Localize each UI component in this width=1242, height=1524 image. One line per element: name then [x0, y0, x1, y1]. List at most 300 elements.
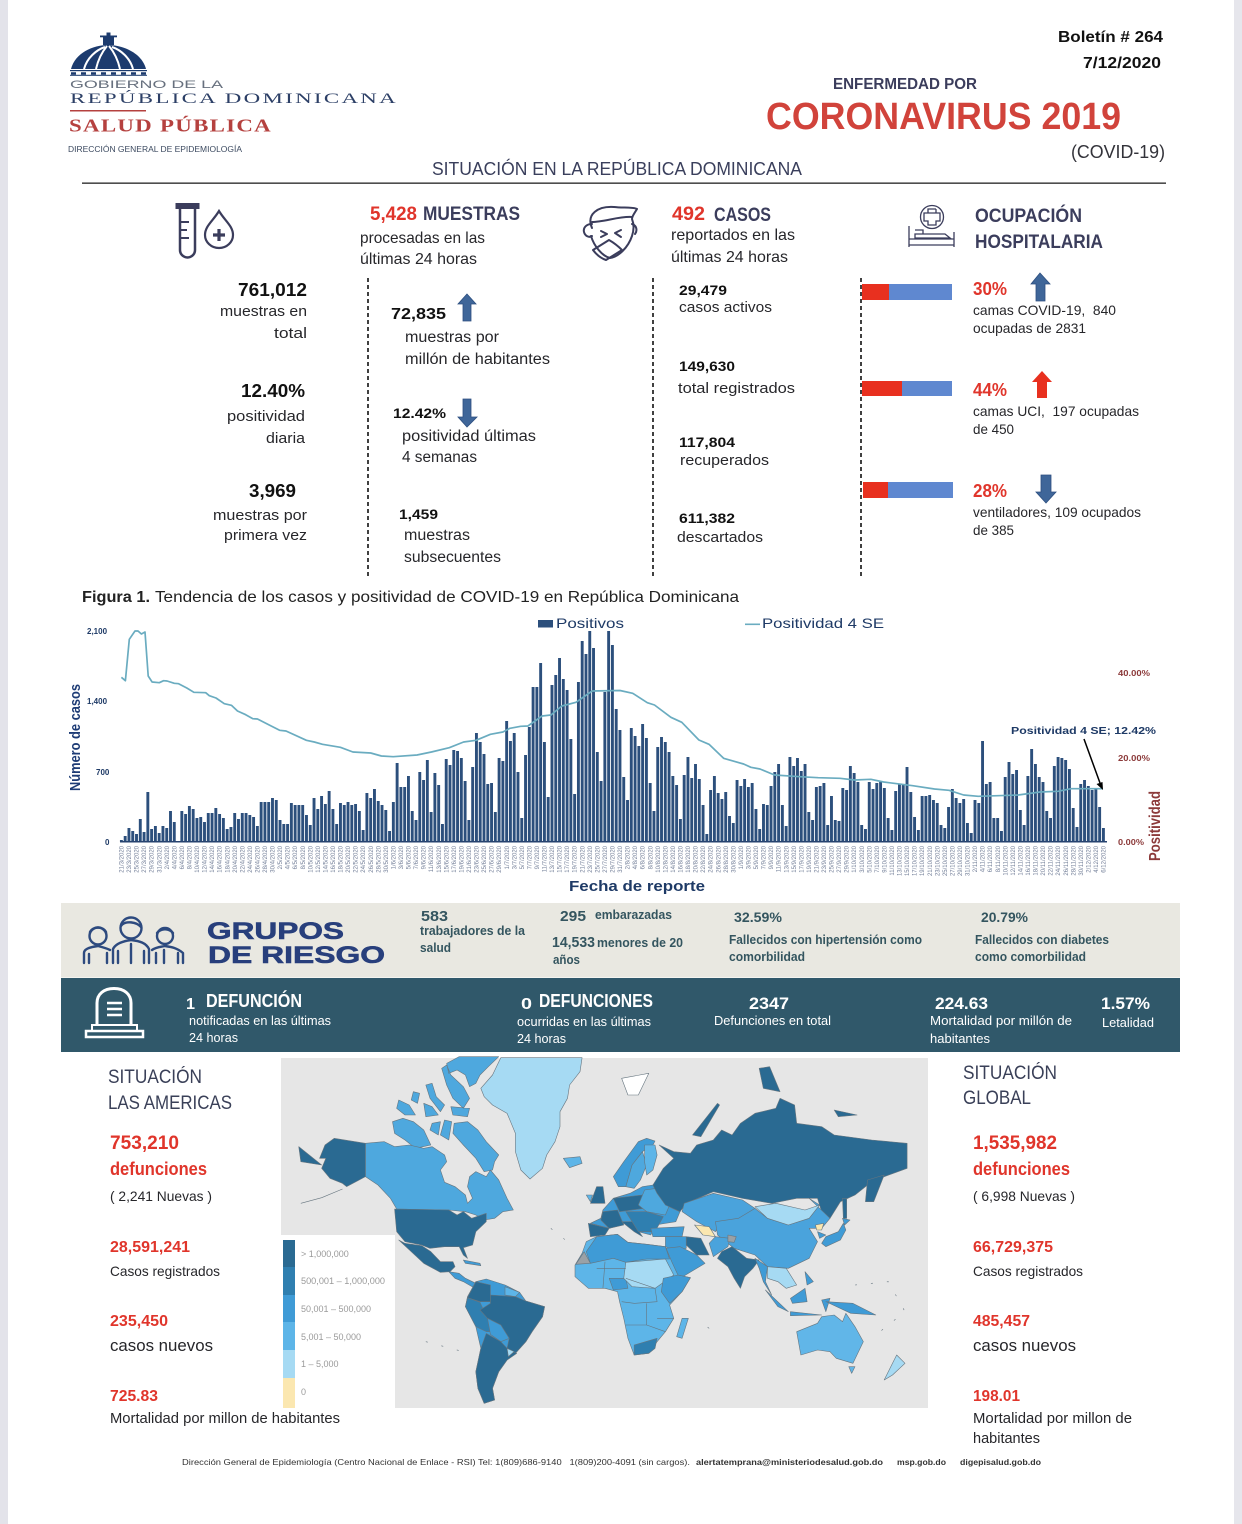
x axis date labels: 23/9/2020	[822, 845, 828, 873]
x axis date labels: 8/4/2020	[188, 845, 194, 869]
x axis date labels: 13/10/2020	[898, 845, 904, 876]
heading: situación global: SITUACIÓN	[963, 1062, 1057, 1084]
map legend: 1 – 5,000	[301, 1359, 339, 1369]
x axis date labels: 3/10/2020	[860, 845, 866, 873]
heading: grupos de riesgo: DE RIESGO	[208, 942, 385, 969]
x axis date labels: 10/8/2020	[656, 845, 662, 873]
stat: recuperados: 117,804	[679, 434, 735, 450]
stat: mortalidad Américas: 725.83	[110, 1388, 158, 1405]
x axis date labels: 24/8/2020	[709, 845, 715, 873]
stat: mortalidad global: habitantes	[973, 1430, 1040, 1447]
x axis date labels: 20/11/2020	[1041, 845, 1047, 876]
title	[766, 76, 1165, 162]
x axis date labels: 21/9/2020	[814, 845, 820, 873]
map: Indonesia and Philippines	[765, 1272, 876, 1316]
map: Norway	[613, 1138, 655, 1187]
x axis date labels: 8/11/2020	[996, 845, 1002, 872]
stat: camas COVID-19 30%: camas COVID-19, 840	[973, 302, 1116, 318]
x axis date labels: 17/9/2020	[799, 845, 805, 873]
map: Aleutians	[301, 1189, 343, 1203]
stat: camas UCI 44%: 44%	[973, 380, 1007, 400]
x axis date labels: 6/11/2020	[988, 845, 994, 872]
map: Afghanistan grey patch	[728, 1235, 736, 1242]
map: Ethiopia Horn	[661, 1275, 690, 1303]
panel: casos header: últimas 24 horas	[671, 249, 788, 266]
bulletin number and date: Boletín # 264	[1058, 29, 1163, 46]
x axis date labels: 16/5/2020	[331, 845, 337, 873]
stat: diabetes: 20.79%	[981, 909, 1029, 925]
map: Peru Ecuador	[465, 1298, 497, 1332]
stat: defunciones global: defunciones	[973, 1159, 1070, 1179]
panel: casos header	[671, 204, 795, 266]
stat: ventiladores 28%: ventiladores, 109 ocupados	[973, 504, 1141, 520]
x axis date labels: 24/11/2020	[1056, 845, 1062, 876]
logo: Gobierno de la República Dominicana, Salud Pública	[68, 32, 398, 154]
map: Guianas	[505, 1287, 520, 1297]
stat: 72,835 muestras por millón: 72,835	[391, 306, 446, 323]
heading: grupos de riesgo	[207, 918, 385, 969]
callout: Positividad 4 SE 12.42%: Positividad 4 SE; 12.42%	[1011, 725, 1157, 737]
x axis date labels: 26/11/2020	[1064, 845, 1070, 876]
x axis date labels: 16/8/2020	[678, 845, 684, 873]
x axis date labels: 15/10/2020	[905, 845, 911, 876]
stat: 1,459 muestras subsecuentes: 1,459	[399, 506, 438, 522]
stat: mortalidad global: Mortalidad por millon de	[973, 1410, 1132, 1427]
stat: menores de 20 años: 14,533	[552, 934, 595, 951]
stat: 12.40% positividad diaria: diaria	[266, 430, 306, 447]
stat: 72,835 muestras por millón: muestras por	[405, 329, 499, 346]
x axis date labels: 21/10/2020	[928, 845, 934, 876]
x axis date labels: 4/4/2020	[172, 845, 178, 869]
arrow: down	[458, 399, 477, 427]
stat: defunciones en total	[714, 994, 831, 1028]
x axis date labels: 13/9/2020	[784, 845, 790, 873]
x axis date labels: 12/5/2020	[316, 845, 322, 873]
stat: 1,459 muestras subsecuentes: subsecuentes	[404, 549, 501, 566]
x axis date labels: 17/6/2020	[452, 845, 458, 873]
map: Svalbard	[622, 1073, 649, 1095]
stat: 3,969 muestras por primera vez: muestras por	[213, 507, 307, 524]
x axis date labels: 20/5/2020	[346, 845, 352, 873]
x axis date labels: 26/8/2020	[716, 845, 722, 873]
map legend: 5,001 – 50,000	[301, 1332, 361, 1342]
panel: muestras totals column	[213, 280, 307, 544]
x axis date labels: 25/7/2020	[595, 845, 601, 873]
stat: hipertensión: 32.59%	[734, 909, 783, 925]
x axis date labels: 29/6/2020	[497, 845, 503, 873]
stat: defunciones global: ( 6,998 Nuevas )	[973, 1188, 1075, 1204]
x axis date labels: 1/10/2020	[852, 845, 858, 873]
footer: msp.gob.do	[897, 1457, 946, 1467]
x axis date labels: 22/11/2020	[1049, 845, 1055, 876]
stat: 12.42% positividad últimas 4 semanas: 12.42%	[393, 405, 447, 421]
stat: casos nuevos global: casos nuevos	[973, 1337, 1076, 1355]
panel: muestras header: MUESTRAS	[423, 204, 520, 225]
x axis date labels: 30/4/2020	[271, 845, 277, 873]
x axis date labels: 11/10/2020	[890, 845, 896, 876]
stat: mortalidad por millón: habitantes	[930, 1031, 990, 1046]
x axis date labels: 16/11/2020	[1026, 845, 1032, 876]
map: Chile Argentina	[476, 1333, 517, 1403]
panel: situación las Américas	[108, 1066, 340, 1427]
map: Spain	[588, 1223, 609, 1237]
figure heading: Figura 1.	[82, 589, 150, 606]
stat: 3,969 muestras por primera vez: primera vez	[224, 527, 307, 544]
map: Greenland	[481, 1058, 582, 1179]
stat: menores de 20 años: menores de 20	[597, 936, 683, 950]
map: Australia	[797, 1313, 863, 1373]
map: Nigeria	[609, 1278, 628, 1290]
x axis date labels: 18/8/2020	[686, 845, 692, 873]
stat: 761,012 muestras en total: muestras en	[220, 303, 307, 320]
panel: casos header: reportados en las	[671, 227, 795, 244]
heading: situación las Américas	[108, 1066, 232, 1114]
x axis date labels: 7/10/2020	[875, 845, 881, 873]
chart legend: Positivos	[556, 615, 624, 631]
stat: embarazadas: 295	[560, 908, 586, 925]
stat: casos nuevos Américas	[110, 1313, 213, 1355]
stat: diabetes: Fallecidos con diabetes	[975, 932, 1109, 947]
map: Bolivia Paraguay	[488, 1318, 509, 1342]
map: Italy	[622, 1222, 643, 1237]
stat: trabajadores de la salud: 583	[421, 908, 448, 925]
stat: casos nuevos global: 485,457	[973, 1313, 1030, 1330]
stat: 1,459 muestras subsecuentes: muestras	[404, 527, 470, 544]
panel: situación global	[963, 1062, 1132, 1447]
stat: defunciones Américas: ( 2,241 Nuevas )	[110, 1188, 212, 1204]
map: New Zealand	[884, 1355, 905, 1380]
line: positividad 4 SE	[121, 631, 1103, 796]
stat: casos nuevos global	[973, 1313, 1076, 1355]
map: Turkey	[651, 1227, 684, 1237]
stat: 0 defunciones: 24 horas	[517, 1031, 566, 1046]
x axis date labels: 22/8/2020	[701, 845, 707, 873]
chart: world map	[280, 1057, 928, 1408]
panel: muestras header: 5,428	[370, 204, 417, 225]
stat: hipertensión	[729, 909, 922, 964]
x axis date labels: 28/4/2020	[263, 845, 269, 873]
panel: muestras header: últimas 24 horas	[360, 251, 477, 268]
map: Brazil	[480, 1295, 545, 1353]
map legend: > 1,000,000	[301, 1249, 349, 1259]
panel: ocupación hospitalaria header: OCUPACIÓN	[975, 205, 1082, 227]
x axis date labels: 5/9/2020	[754, 845, 760, 869]
figure heading: Tendencia de los casos y positividad de COVID-19 en República Dominicana	[155, 589, 739, 606]
x axis date labels: 22/4/2020	[240, 845, 246, 873]
map: Myanmar Thailand	[755, 1258, 772, 1295]
map: Balkans	[626, 1212, 663, 1232]
map legend: 500,001 – 1,000,000	[301, 1276, 385, 1286]
x axis date labels: 26/4/2020	[256, 845, 262, 873]
logo line: República Dominicana: REPÚBLICA DOMINICANA	[70, 90, 398, 107]
stat: menores de 20 años	[552, 934, 683, 967]
x axis date labels: 11/6/2020	[429, 845, 435, 872]
map: Colombia	[468, 1282, 490, 1302]
panel: muestras rates column	[391, 294, 550, 566]
x axis date labels: 18/5/2020	[339, 845, 345, 873]
stat: defunciones Américas: defunciones	[110, 1159, 207, 1179]
stat: descartados: 611,382	[679, 510, 735, 526]
icon: hospital bed	[909, 206, 954, 247]
stat: casos registrados Américas	[110, 1239, 220, 1279]
map: Ireland	[586, 1195, 593, 1202]
x axis date labels: 10/5/2020	[308, 845, 314, 873]
panel: defunciones	[61, 978, 1180, 1052]
map: Russia	[653, 1098, 907, 1218]
stat: hipertensión: Fallecidos con hipertensión como	[729, 932, 922, 947]
x axis date labels: 22/5/2020	[354, 845, 360, 873]
stat: casos registrados global	[973, 1239, 1083, 1279]
stat: mortalidad global: 198.01	[973, 1388, 1020, 1405]
stat: defunciones Américas	[110, 1133, 212, 1204]
map: China	[715, 1198, 830, 1268]
map: Turkmenistan	[695, 1225, 715, 1237]
map: United States	[395, 1209, 486, 1258]
stat: mortalidad Américas	[110, 1388, 340, 1427]
x axis date labels: 5/10/2020	[867, 845, 873, 873]
title: ENFERMEDAD POR	[833, 76, 977, 93]
x axis date labels: 5/7/2020	[520, 845, 526, 869]
x axis date labels: 2/4/2020	[165, 845, 171, 869]
icon: three people	[84, 918, 183, 963]
x axis date labels: 9/9/2020	[769, 845, 775, 869]
stat: 761,012 muestras en total	[220, 280, 307, 342]
map: scattered islands	[426, 1228, 905, 1352]
x axis date labels: 11/9/2020	[777, 845, 783, 872]
stat: camas UCI 44%: camas UCI, 197 ocupadas	[973, 403, 1139, 419]
x axis date labels: 27/9/2020	[837, 845, 843, 873]
x axis date labels	[120, 845, 1108, 876]
x axis date labels: 21/6/2020	[467, 845, 473, 873]
right axis labels: 40.00%	[1118, 668, 1150, 678]
stat: mortalidad Américas: Mortalidad por millon de habitantes	[110, 1410, 340, 1427]
heading: situación global: GLOBAL	[963, 1088, 1031, 1109]
stat: hipertensión: comorbilidad	[729, 949, 805, 964]
stat: recuperados: recuperados	[680, 452, 769, 469]
left axis labels: 700	[96, 768, 110, 777]
stat: 12.42% positividad últimas 4 semanas: 4 semanas	[402, 449, 477, 466]
map: India	[718, 1247, 759, 1288]
chart legend: Positividad 4 SE	[762, 615, 884, 631]
stat: defunciones en total: 2347	[749, 994, 789, 1013]
map: Sweden	[626, 1152, 647, 1188]
stat: mortalidad por millón	[930, 994, 1072, 1046]
map: South America base	[465, 1279, 545, 1403]
heading: situación global	[963, 1062, 1057, 1109]
x axis date labels: 8/5/2020	[301, 845, 307, 869]
stat: casos nuevos Américas: casos nuevos	[110, 1337, 213, 1355]
right axis labels	[1118, 668, 1150, 847]
x axis date labels: 24/4/2020	[248, 845, 254, 873]
x axis date labels: 1/6/2020	[391, 845, 397, 869]
map: South Africa	[634, 1338, 657, 1355]
x axis date labels: 27/3/2020	[142, 845, 148, 873]
logo line: Dirección General de Epidemiología: DIRECCIÓN GENERAL DE EPIDEMIOLOGÍA	[68, 144, 242, 154]
x axis date labels: 29/3/2020	[150, 845, 156, 873]
subtitle: situación en la República Dominicana: SITUACIÓN EN LA REPÚBLICA DOMINICANA	[432, 158, 802, 179]
stat: diabetes	[975, 909, 1109, 964]
x axis date labels: 13/7/2020	[550, 845, 556, 873]
stat: 0 defunciones: ocurridas en las últimas	[517, 1014, 651, 1029]
footer	[182, 1457, 1041, 1467]
x axis date labels: 13/6/2020	[437, 845, 443, 873]
x axis date labels: 19/10/2020	[920, 845, 926, 876]
stat: descartados	[677, 510, 763, 546]
map: Alaska	[299, 1138, 365, 1187]
map legend	[280, 1235, 395, 1408]
x axis date labels: 6/8/2020	[641, 845, 647, 869]
x axis date labels: 26/5/2020	[369, 845, 375, 873]
x axis date labels: 21/7/2020	[580, 845, 586, 873]
x axis date labels: 30/5/2020	[384, 845, 390, 873]
bulletin number and date	[1058, 29, 1163, 72]
stat: trabajadores de la salud: trabajadores de la	[420, 924, 526, 938]
x axis date labels: 3/6/2020	[399, 845, 405, 869]
arrow: up	[458, 294, 476, 321]
panel: muestras header: procesadas en las	[360, 230, 485, 247]
panel: hospital occupancy	[862, 273, 1141, 538]
right axis title: Positividad	[1147, 791, 1164, 861]
stat: embarazadas	[560, 908, 672, 925]
stat: 12.42% positividad últimas 4 semanas: positividad últimas	[402, 428, 536, 445]
stat: 72,835 muestras por millón	[391, 306, 550, 368]
x axis date labels: 5/6/2020	[407, 845, 413, 869]
stat: 3,969 muestras por primera vez	[213, 481, 307, 544]
panel: casos header: 492	[672, 204, 705, 225]
x axis date labels: 27/7/2020	[603, 845, 609, 873]
stat: camas COVID-19 30%: 30%	[973, 279, 1007, 299]
stat: casos activos	[679, 282, 772, 316]
panel: grupos de riesgo	[61, 903, 1180, 978]
map: Japan Korea	[818, 1218, 850, 1247]
stat: defunciones Américas: 753,210	[110, 1133, 179, 1154]
x axis date labels: 6/4/2020	[180, 845, 186, 869]
stat: defunciones global	[973, 1133, 1075, 1204]
title: (COVID-19)	[1071, 142, 1165, 162]
stat: camas UCI 44%	[862, 371, 1139, 437]
footer: Dirección General de Epidemiología (Centro Nacional de Enlace - RSI) Tel: 1(809)686-9140 1(809)200-4091 (sin cargos).	[182, 1457, 690, 1467]
stat: mortalidad por millón: 224.63	[935, 994, 988, 1013]
icon: tombstone	[86, 988, 143, 1037]
x axis date labels: 21/3/2020	[120, 845, 126, 873]
stat: 12.40% positividad diaria	[227, 381, 306, 447]
stat: casos activos: casos activos	[679, 299, 772, 316]
stat: 1 defunción: 24 horas	[189, 1030, 238, 1045]
stat: 1 defunción	[186, 990, 331, 1045]
stat: 12.42% positividad últimas 4 semanas	[393, 405, 536, 466]
x axis date labels: 10/11/2020	[1003, 845, 1009, 876]
right axis labels: 0.00%	[1118, 837, 1144, 847]
stat: mortalidad por millón: Mortalidad por millón de	[930, 1013, 1072, 1028]
map: Central America and Caribbean	[449, 1260, 481, 1288]
x axis date labels: 29/10/2020	[958, 845, 964, 876]
x axis date labels: 15/6/2020	[444, 845, 450, 873]
x axis date labels: 15/7/2020	[558, 845, 564, 873]
stat: menores de 20 años: años	[553, 953, 580, 967]
map: Western Sahara	[576, 1252, 590, 1264]
logo line: Salud Pública: SALUD PÚBLICA	[69, 114, 272, 136]
map: Uruguay	[507, 1348, 514, 1357]
bars: daily positives	[121, 631, 1103, 842]
map: Iceland	[563, 1157, 582, 1168]
stat: casos registrados Américas: Casos registrados	[110, 1263, 220, 1279]
x axis date labels: 6/5/2020	[293, 845, 299, 869]
x axis date labels: 4/8/2020	[633, 845, 639, 869]
stat: 0 defunciones: 0	[521, 996, 532, 1013]
panel: ocupación hospitalaria header: HOSPITALARIA	[975, 232, 1103, 253]
stat: casos registrados global: Casos registrados	[973, 1263, 1083, 1279]
x axis date labels: 14/11/2020	[1018, 845, 1024, 876]
chart: cases and positivity trend	[67, 615, 1164, 895]
x axis date labels: 9/10/2020	[882, 845, 888, 873]
stat: 0 defunciones: DEFUNCIONES	[539, 991, 653, 1011]
x axis date labels: 4/11/2020	[981, 845, 987, 872]
map: United Kingdom	[590, 1187, 605, 1203]
stat: total registrados: 149,630	[679, 358, 735, 374]
title: CORONAVIRUS 2019	[766, 96, 1121, 138]
panel: ocupación hospitalaria header	[975, 205, 1103, 253]
stat: 72,835 muestras por millón: millón de habitantes	[405, 351, 550, 368]
map: Kazakhstan and Central Asia	[682, 1193, 755, 1232]
x axis date labels: 4/5/2020	[286, 845, 292, 869]
x axis date labels: 10/4/2020	[195, 845, 201, 873]
x axis date labels: 8/8/2020	[648, 845, 654, 869]
x axis date labels: 23/7/2020	[588, 845, 594, 873]
map: Madagascar	[677, 1318, 688, 1338]
x axis title: Fecha de reporte	[569, 879, 705, 895]
stat: ventiladores 28%: 28%	[973, 481, 1007, 501]
left axis title: Número de casos	[67, 684, 84, 791]
x axis date labels: 12/8/2020	[663, 845, 669, 873]
map: African country borders	[597, 1262, 674, 1332]
x axis date labels: 27/10/2020	[950, 845, 956, 876]
map: Levant Iraq	[665, 1237, 686, 1252]
x axis date labels: 27/6/2020	[490, 845, 496, 873]
x axis date labels: 2/11/2020	[973, 845, 979, 872]
x axis date labels: 1/7/2020	[505, 845, 511, 869]
x axis date labels: 2/5/2020	[278, 845, 284, 869]
x axis date labels: 4/12/2020	[1094, 845, 1100, 873]
x axis date labels: 1/9/2020	[739, 845, 745, 869]
x axis date labels: 17/7/2020	[565, 845, 571, 873]
stat: total registrados	[678, 358, 795, 397]
x axis date labels: 25/6/2020	[482, 845, 488, 873]
panel: muestras header	[360, 204, 520, 268]
footer: alertatemprana@ministeriodesalud.gob.do	[696, 1457, 883, 1467]
x axis date labels: 30/8/2020	[731, 845, 737, 873]
stat: letalidad	[1101, 994, 1154, 1030]
stat: letalidad: 1.57%	[1101, 994, 1150, 1013]
stat: total registrados: total registrados	[678, 380, 795, 397]
map: Indochina	[768, 1267, 797, 1288]
x axis date labels: 25/10/2020	[943, 845, 949, 876]
x axis date labels: 11/7/2020	[542, 845, 548, 872]
x axis date labels: 12/11/2020	[1011, 845, 1017, 876]
x axis date labels: 20/4/2020	[233, 845, 239, 873]
x axis date labels: 15/9/2020	[792, 845, 798, 873]
map: Canada	[365, 1142, 513, 1220]
chart legend	[538, 615, 884, 631]
callout: Positividad 4 SE 12.42%	[1011, 725, 1157, 790]
x axis date labels: 2/8/2020	[626, 845, 632, 869]
left axis labels: 1,400	[87, 697, 108, 706]
icon: dome	[70, 32, 147, 76]
x axis date labels: 2/12/2020	[1086, 845, 1092, 873]
map: Mexico	[399, 1240, 455, 1272]
stat: casos registrados Américas: 28,591,241	[110, 1239, 190, 1256]
panel: casos header: CASOS	[714, 205, 771, 226]
map: Pakistan	[709, 1237, 730, 1257]
